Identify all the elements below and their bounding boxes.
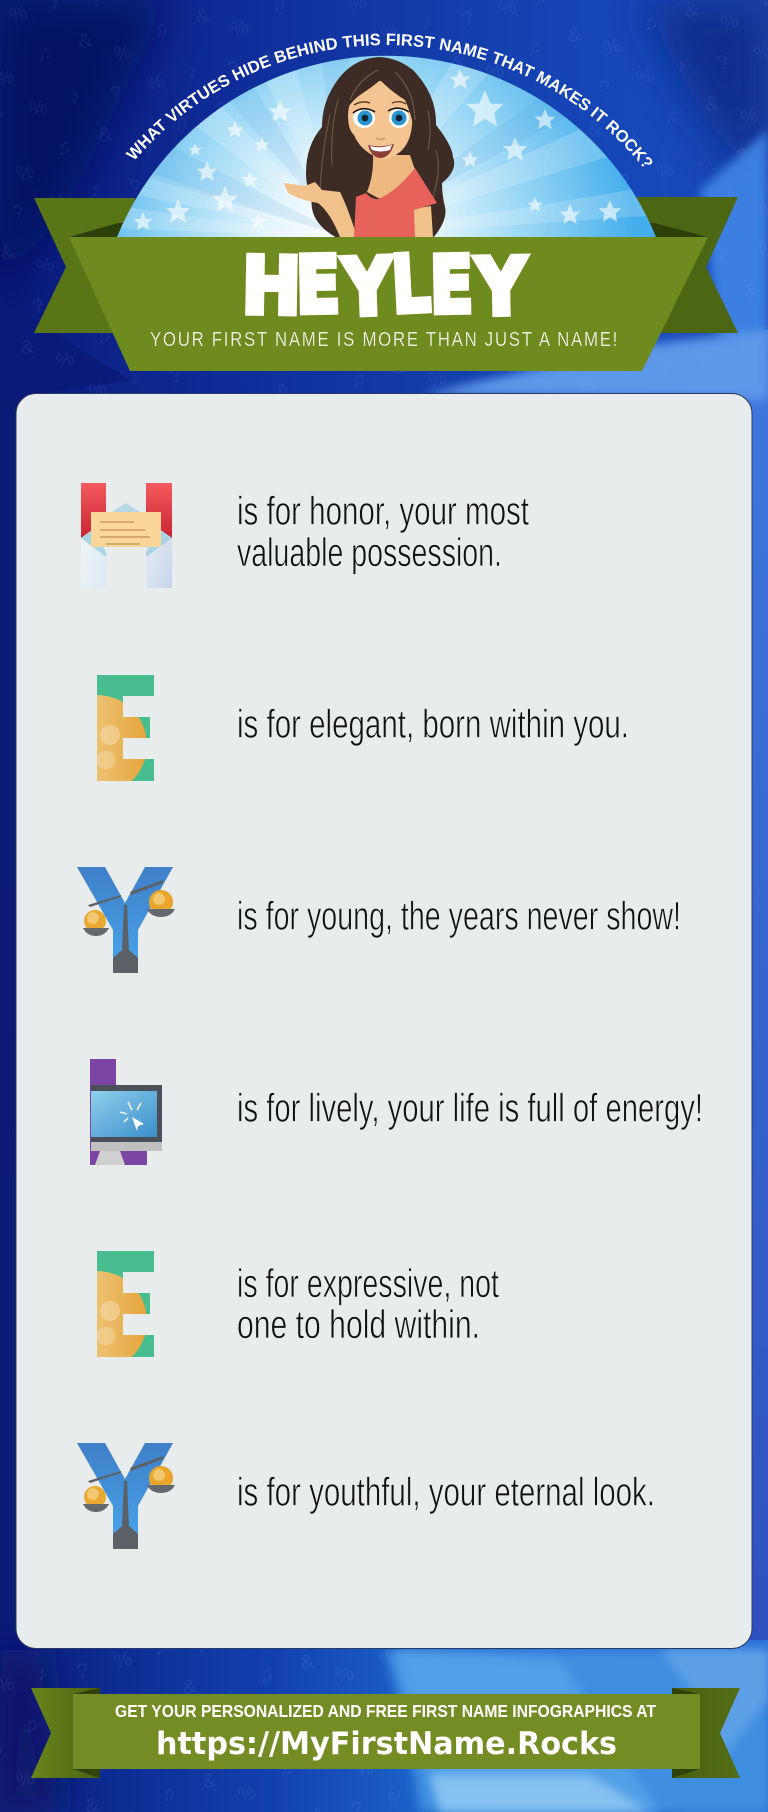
text: second E line bbox=[237, 1262, 499, 1347]
shirt bbox=[354, 168, 437, 237]
hand and arm bbox=[284, 182, 357, 237]
footer call to action: GET YOUR PERSONALIZED AND FREE FIRST NAME INFOGRAPHICS AT bbox=[115, 1701, 656, 1721]
icon: second letter E bbox=[47, 1251, 154, 1371]
title: HEYLEY: Y bbox=[474, 243, 528, 333]
title: HEYLEY: H bbox=[241, 241, 302, 332]
hair front bbox=[340, 60, 419, 135]
subtitle: YOUR FIRST NAME IS MORE THAN JUST A NAME! bbox=[150, 329, 619, 351]
icon: letter H with envelope bbox=[81, 483, 172, 588]
icon: letter L with computer bbox=[90, 1059, 162, 1165]
neck bbox=[367, 155, 415, 198]
sunburst dome bbox=[110, 50, 662, 240]
right arm bbox=[413, 206, 433, 237]
title: HEYLEY: Y bbox=[341, 242, 395, 334]
text: second E line: one to hold within. bbox=[237, 1303, 480, 1347]
title: HEYLEY: E bbox=[429, 241, 474, 331]
eyes bbox=[353, 108, 375, 128]
text: H line bbox=[237, 490, 529, 575]
arched tagline: WHAT VIRTUES HIDE BEHIND THIS FIRST NAME THAT MAKES IT ROCK? bbox=[125, 34, 652, 167]
text: H line: valuable possession. bbox=[237, 531, 502, 575]
face bbox=[348, 81, 412, 159]
text: second E line: is for expressive, not bbox=[237, 1262, 499, 1306]
icon: second letter Y bbox=[77, 1443, 175, 1549]
hair back bbox=[306, 57, 454, 238]
title: HEYLEY: E bbox=[295, 241, 341, 331]
icon: letter Y with scales bbox=[77, 867, 175, 973]
text: H line: is for honor, your most bbox=[237, 490, 529, 534]
text: E line: is for elegant, born within you. bbox=[237, 702, 629, 746]
icon: letter E with planet bbox=[47, 675, 154, 795]
ribbon back tails (header) bbox=[34, 197, 738, 333]
character: cartoon woman bbox=[284, 57, 454, 238]
title: HEYLEY: L bbox=[390, 239, 432, 331]
title: HEYLEY bbox=[241, 239, 528, 334]
footer ribbon bbox=[31, 1688, 740, 1778]
nose and mouth bbox=[376, 138, 385, 140]
ribbon main banner bbox=[69, 237, 708, 371]
panel: letters card bbox=[16, 394, 752, 1648]
footer url: https://MyFirstName.Rocks bbox=[156, 1726, 617, 1762]
